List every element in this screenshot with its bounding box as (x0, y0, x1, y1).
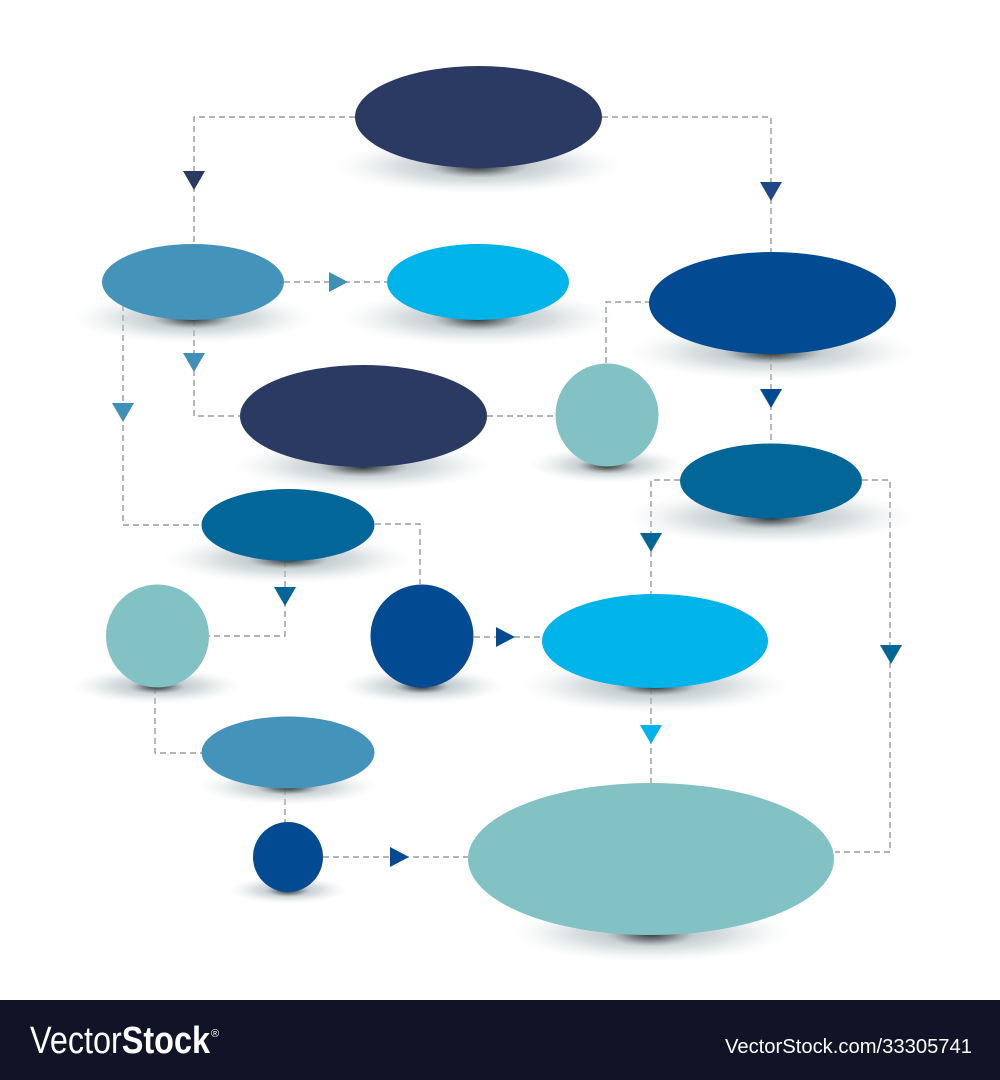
node: teal circle left (106, 584, 209, 688)
arrow: right to cyan large oval (496, 627, 515, 647)
node: mid-blue oval lower (202, 716, 374, 788)
image id: VectorStock.com/33305741 (725, 1036, 972, 1058)
arrow: down to largest oval (640, 725, 662, 744)
arrow: down to steel oval right (760, 389, 782, 408)
arrow: down left branch (112, 403, 134, 422)
connectors (123, 117, 890, 857)
footer bar (0, 1000, 1000, 1080)
arrow: down right branch (880, 645, 902, 664)
shadows (71, 138, 917, 962)
node: royal blue oval right (649, 252, 896, 354)
node: steel blue oval right (680, 444, 862, 518)
arrow: right to cyan oval (329, 272, 348, 292)
node: royal blue circle (370, 584, 474, 688)
arrow: down to right oval (760, 182, 782, 201)
arrow: down to navy centre (183, 353, 205, 372)
node: cyan oval (387, 244, 569, 320)
node: navy oval centre (240, 365, 487, 467)
arrow: down to left oval (183, 171, 205, 190)
arrow: right to largest oval (390, 847, 409, 867)
node: mid-blue oval left (102, 244, 284, 320)
logo text: VectorStock (30, 1020, 211, 1062)
node: small royal blue circle (253, 822, 323, 892)
node: steel blue oval centre (202, 489, 374, 561)
node: cyan oval large (542, 594, 768, 688)
registered mark: ® (211, 1028, 219, 1040)
arrow: down to teal circle (274, 587, 296, 606)
node: teal circle centre (556, 364, 658, 466)
node: largest teal oval (468, 783, 834, 935)
arrow: down to cyan large oval (640, 533, 662, 552)
node: top navy oval (355, 66, 602, 168)
